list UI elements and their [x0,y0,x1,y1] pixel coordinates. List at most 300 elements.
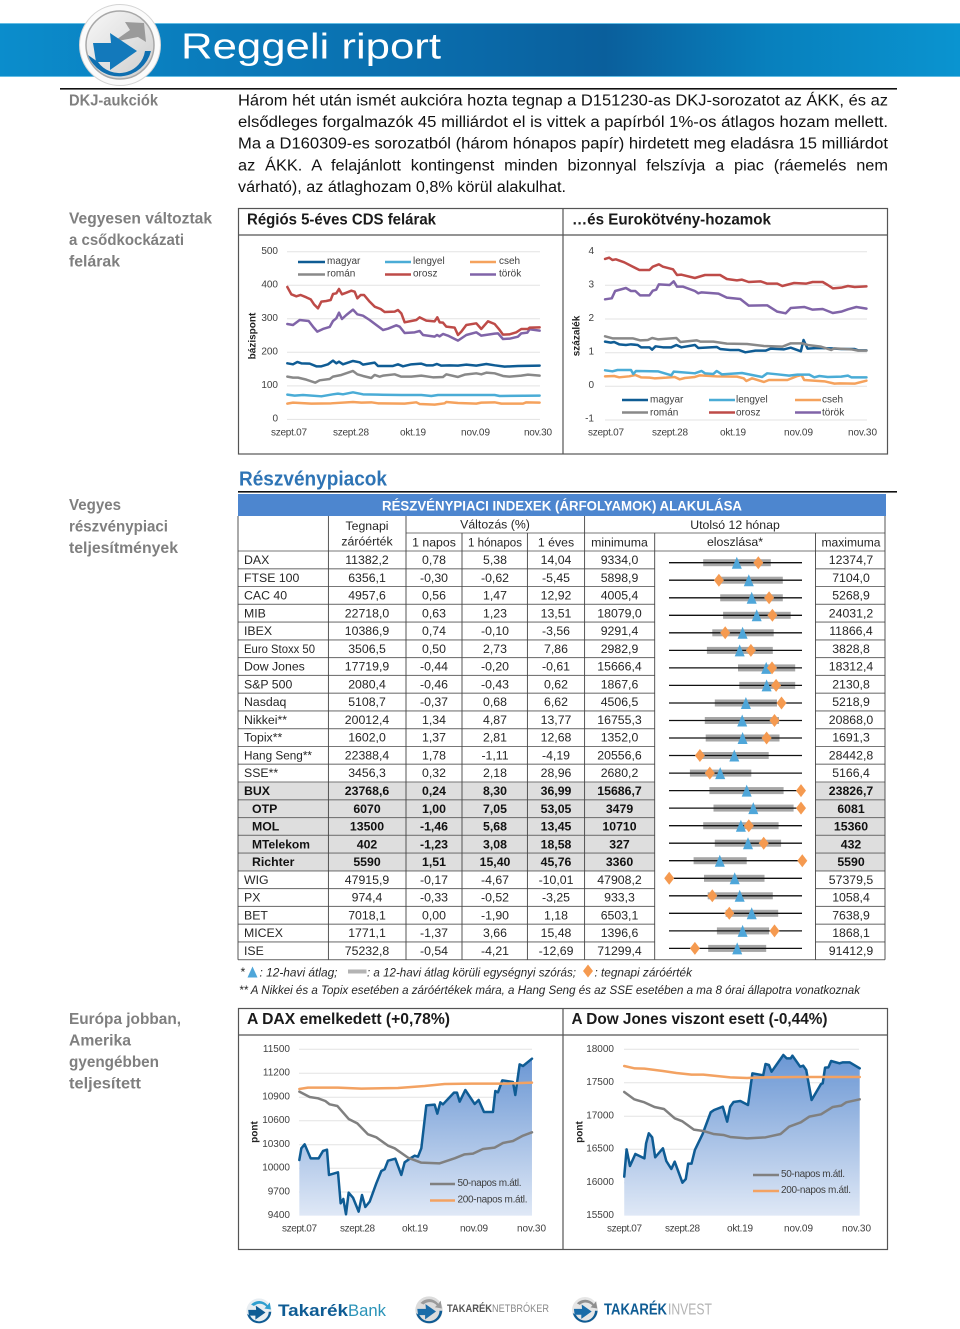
text block: DKJ auction commentary: várható), az átlaghozam 0,8% körül alakulhat. [238,179,566,196]
row: Richter: 5590 [837,855,865,869]
row: BUX: 23768,6 [345,784,389,798]
line chart: CDS: 100 [261,380,278,391]
area chart: DAX: nov.09 [460,1224,488,1234]
row: MIB: 1,23 [483,606,507,620]
row: IBEX: IBEX [244,624,272,638]
row: Euro Stoxx 50: 3828,8 [832,642,870,656]
row: Euro Stoxx 50: 3506,5 [348,642,386,656]
table footnotes and key: * [240,965,246,979]
row: S&P 500 [244,677,870,692]
row: S&P 500: 0,62 [544,677,568,691]
row: IBEX: 0,74 [422,624,446,638]
row: ISE: ISE [244,944,264,958]
row: Euro Stoxx 50: Euro Stoxx 50 [244,642,315,656]
area chart: DAX: szept.28 [340,1224,375,1234]
row: Richter: 45,76 [541,855,572,869]
row: Euro Stoxx 50: 2982,9 [601,642,638,656]
chart legend: Eurobond: román [650,408,678,418]
row: Richter: 5590 [353,855,381,869]
row: Nasdaq: 5108,7 [348,695,386,709]
footer logo: TakarékNetBróker [415,1296,549,1324]
row: DAX: 12374,7 [829,553,873,567]
chart legend: CDS [298,256,522,280]
row: Topix: 12,68 [541,731,572,745]
side heading: CDS: Vegyesen változtak [69,210,212,228]
row: MOL: 10710 [602,820,637,834]
heading: Eurobond chart: …és Eurokötvény-hozamok [572,212,771,228]
row: WIG: -0,17 [420,873,448,887]
row: DAX: 0,78 [422,553,446,567]
row: MICEX: 1868,1 [832,926,870,940]
chart legend: Eurobond [622,394,845,418]
row: BET: 7018,1 [348,908,386,922]
row: SSE [244,766,870,780]
row: Hang Seng: 22388,4 [345,748,389,762]
area chart: DAX: 10900 [262,1092,290,1102]
row: BUX: BUX [244,784,271,798]
row: Dow Jones [244,660,873,674]
panel: CDS and Eurobond charts [238,208,888,454]
line chart: Eurobond yields: szept.28 [652,428,688,438]
row: Richter: 1,51 [422,855,446,869]
icon: Reggeli riport logo [80,4,160,86]
heading: CDS chart: Régiós 5-éves CDS felárak [247,212,436,228]
row: OTP: 1,00 [422,802,446,816]
side heading: Europe: Európa jobban, [69,1011,181,1028]
chart legend: Dow Jones [753,1169,851,1196]
row: Hang Seng: -1,11 [481,748,509,762]
footer logo: TakarékInvest [572,1297,712,1323]
panel: DAX and Dow Jones charts [238,1008,888,1250]
table column headers: eloszlása* [707,535,763,549]
row: S&P 500: -0,43 [481,677,509,691]
row: BUX: 8,30 [483,784,507,798]
row: IBEX: 9291,4 [601,624,638,638]
row: Hang Seng: 1,78 [422,748,446,762]
row: IBEX: -3,56 [542,624,570,638]
line chart: Eurobond yields: nov.09 [784,428,813,438]
row: PX: -0,52 [481,891,509,905]
row: WIG: 47915,9 [345,873,389,887]
table column headers: 1 éves [538,536,574,550]
row: MIB: 18079,0 [597,606,642,620]
row: FTSE 100: FTSE 100 [244,571,300,585]
row: OTP: 53,05 [541,802,572,816]
table footnotes and key: ** A Nikkei és a Topix esetében a záróértékek mára, a Hang Seng és az SSE esetében a ma 8 órai állapotra vonatkoznak [239,983,861,997]
row: WIG: WIG [244,873,269,887]
axis title: pont: pont [574,1121,586,1143]
row: Hang Seng: 20556,6 [597,748,642,762]
row: MIB: 22718,0 [345,606,389,620]
row: Nasdaq: 0,68 [483,695,507,709]
area chart: DAX: 11500 [263,1044,290,1055]
row: FTSE 100: -5,45 [542,571,570,585]
line chart: Eurobond yields: 2 [588,313,594,324]
row: BUX: 23826,7 [829,784,873,798]
row: MTelekom: -1,23 [420,837,448,851]
row: CAC 40: 12,92 [541,588,572,602]
footer logo: TakarékInvest: INVEST [668,1302,712,1318]
table column headers: Változás (%) [460,518,530,532]
area chart: DAX: 9700 [268,1186,290,1198]
line chart: Eurobond yields: 0 [588,380,594,391]
section rule [238,491,897,493]
axis title: bázispont: bázispont [248,312,258,359]
table column headers [341,518,881,550]
row: WIG: -10,01 [539,873,574,887]
row: MTelekom: 432 [841,837,861,851]
top rule [60,88,897,90]
axis title: százalék: százalék [572,315,582,356]
table column headers: Tegnapi [345,519,389,533]
row: S&P 500: S&P 500 [244,677,292,691]
row: CAC 40: 1,47 [483,588,507,602]
table title bar: RÉSZVÉNYPIACI INDEXEK (ÁRFOLYAMOK) ALAKULÁSA [382,498,742,514]
row: MIB: 0,63 [422,606,446,620]
chart legend: Eurobond: orosz [736,408,760,418]
row: Nasdaq: 6,62 [544,695,568,709]
row: SSE: 2680,2 [601,766,638,780]
row: Nasdaq: 5218,9 [832,695,870,709]
chart legend: Eurobond: magyar [650,394,684,406]
side heading: DKJ-aukciók: DKJ-aukciók [69,92,158,110]
row: DAX [244,553,873,569]
area chart: Dow Jones: szept.07 [607,1224,642,1234]
row: BET: -1,90 [481,908,509,922]
row: Hang Seng [244,748,873,762]
row: MICEX: 15,48 [541,926,572,940]
chart legend: CDS: román [327,268,355,280]
row: Euro Stoxx 50: 7,86 [544,642,568,656]
row: DAX: 5,38 [483,553,507,567]
chart legend: Eurobond: lengyel [736,394,768,406]
row: SSE: 28,96 [541,766,572,780]
row: Topix: 2,81 [483,731,507,745]
chart legend: CDS: török [499,268,522,280]
row: S&P 500: 2080,4 [348,677,386,691]
area chart: DAX: 11200 [263,1068,290,1078]
line chart: Eurobond yields: 3 [588,280,594,290]
row: Topix: 1602,0 [348,731,386,745]
side heading: CDS [69,210,212,270]
table footnotes and key: : tegnapi záróérték [594,966,693,980]
row: SSE: 5166,4 [832,766,870,780]
row: MICEX [244,924,870,940]
line chart: CDS: 400 [261,280,278,290]
row: Topix: Topix** [244,731,282,745]
row: ISE: -12,69 [539,944,574,958]
line chart: CDS: 0 [272,414,278,424]
row: BET: 6503,1 [601,908,638,922]
row: MTelekom: MTelekom [252,837,310,851]
row: MOL: 13,45 [541,820,572,834]
row: FTSE 100 [244,571,870,587]
line chart: CDS: szept.28 [333,428,369,438]
row: BET [244,907,870,922]
line chart: Eurobond yields: szept.07 [588,428,624,438]
table title bar [238,494,886,516]
row: Nikkei: 16755,3 [597,713,642,727]
row: Richter [252,854,865,869]
chart legend: Dow Jones: 200-napos m.átl. [781,1185,851,1196]
side heading: Europe: teljesített [69,1076,141,1092]
row: FTSE 100: 5898,9 [601,571,638,585]
line chart: Eurobond yields: 1 [588,346,594,358]
table column headers: Utolsó 12 hónap [690,518,780,532]
table column headers: minimuma [591,536,648,550]
row: SSE: 2,18 [483,766,507,780]
row: Nasdaq: Nasdaq [244,695,287,709]
row: S&P 500: 2130,8 [832,677,870,691]
area chart: Dow Jones: 15500 [586,1210,614,1221]
text block: DKJ auction commentary: az ÁKK. A felajánlott kontingenst minden bizonnyal felszívja a piac (ráemelés nem [238,158,888,174]
row: Nikkei: Nikkei** [244,713,287,727]
header banner [0,4,960,86]
footer logo: TakarékBank: Bank [348,1301,386,1320]
row: Topix [244,731,870,745]
row: Euro Stoxx 50: 0,50 [422,642,446,656]
line chart: CDS: 300 [261,313,278,324]
icon: Invest mark [572,1297,598,1323]
table column headers: záróérték [341,534,393,548]
row: FTSE 100: -0,30 [420,571,448,585]
row: DAX: 9334,0 [601,553,638,567]
line chart: CDS: nov.30 [524,428,552,438]
area chart: DAX: 9400 [268,1210,290,1221]
row: CAC 40: 4957,6 [348,588,386,602]
row: MOL [252,819,868,834]
row: OTP: 6081 [837,802,865,816]
row: OTP [252,802,865,816]
row: FTSE 100: -0,62 [481,571,509,585]
row: ISE: -4,21 [481,944,509,958]
area chart: Dow Jones: 16000 [586,1177,614,1188]
row: Nikkei: 20012,4 [345,713,389,727]
row: MIB [244,606,873,622]
row: ISE: 71299,4 [597,944,642,958]
footer logo: TakarékBank [246,1298,386,1324]
row: Euro Stoxx 50: 2,73 [483,642,507,656]
area chart: Dow Jones: 17000 [586,1110,614,1122]
row: Dow Jones: 17719,9 [345,660,389,674]
table column headers: 1 napos [412,536,456,550]
row: Dow Jones: -0,61 [542,660,570,674]
text block: DKJ auction commentary [238,92,889,196]
row: CAC 40: 4005,4 [601,588,638,602]
footer logo: TakarékBank: Takarék [278,1301,349,1320]
area chart: DAX: szept.07 [282,1224,317,1234]
row: BET: 7638,9 [832,908,870,922]
row: Nikkei: 13,77 [541,713,572,727]
row: WIG: 57379,5 [829,873,873,887]
line chart: CDS: szept.07 [271,428,307,438]
banner title: Reggeli riport [181,26,441,66]
row: FTSE 100: 6356,1 [348,571,386,585]
chart legend: Dow Jones: 50-napos m.átl. [781,1169,845,1180]
chart legend: DAX: 200-napos m.átl. [458,1194,528,1206]
row: IBEX: -0,10 [481,624,509,638]
row: Hang Seng: -4,19 [542,748,570,762]
row: MIB: 13,51 [541,606,572,620]
row: MOL: 13500 [350,820,384,834]
side heading: equity: részvénypiaci [69,518,168,536]
row: Dow Jones: 18312,4 [829,660,873,674]
heading: Dow chart: A Dow Jones viszont esett (-0,44%) [572,1011,828,1028]
area chart: Dow Jones: szept.28 [665,1224,700,1234]
row: MIB: 24031,2 [829,606,873,620]
row: SSE: 3456,3 [348,766,386,780]
row: Dow Jones: 15666,4 [597,660,642,674]
line chart: CDS: okt.19 [400,428,426,438]
area chart: DAX: nov.30 [517,1224,546,1234]
heading: DAX chart: A DAX emelkedett (+0,78%) [247,1011,450,1028]
area chart: Dow Jones: 18000 [586,1044,614,1055]
row: Nikkei: 1,34 [422,713,446,727]
row: OTP: OTP [252,802,277,816]
footer logo: TakarékNetBróker: TAKARÉK [447,1302,492,1315]
table footnotes and key: : 12-havi átlag; [260,966,338,980]
chart legend: CDS: cseh [499,256,520,267]
row: Richter: 3360 [606,855,633,869]
table footnotes and key: : a 12-havi átlag körüli egységnyi szórás; [367,966,576,980]
icon: NetBróker mark [415,1296,443,1324]
side heading: equity [69,497,178,557]
row: WIG: -4,67 [481,873,509,887]
chart legend: Eurobond: cseh [822,394,843,406]
row: MTelekom: 3,08 [483,837,507,851]
row: S&P 500: 1867,6 [601,677,638,691]
text block: DKJ auction commentary: Ma a D160309-es sorozatból (három hónapos papír) hirdetett meg eladásra 15 milliárdot [238,136,889,152]
chart legend: Eurobond: török [822,408,845,418]
row: S&P 500: -0,46 [420,677,448,691]
line chart: CDS: 500 [261,246,278,257]
row: CAC 40: 5268,9 [832,588,870,602]
row: Topix: 1,37 [422,731,446,745]
row: PX: -3,25 [542,891,570,905]
row: MICEX: MICEX [244,926,283,940]
chart legend: CDS: magyar [327,256,361,267]
area chart: Dow Jones [574,1044,871,1234]
row: Nasdaq: 4506,5 [601,695,638,709]
row: IBEX: 11866,4 [829,624,873,638]
row: MOL: MOL [252,820,280,834]
row: BET: 1,18 [544,908,568,922]
row: MTelekom [252,837,861,851]
area chart: DAX [250,1044,546,1234]
row: OTP: 3479 [606,802,633,816]
row: DAX: DAX [244,553,269,567]
text block: DKJ auction commentary: elsődleges forgalmazók 45 milliárdot el is vittek a papírból 1%-os átlagos hozam mellett. [238,114,888,131]
row: WIG: 47908,2 [597,873,642,887]
row: BUX: 36,99 [541,784,572,798]
row: BUX: 0,24 [422,784,446,798]
side heading: equity: teljesítmények [69,540,178,557]
side heading: Europe: gyengébben [69,1054,159,1071]
row: Richter: 15,40 [480,855,511,869]
axis title: pont: pont [250,1121,260,1143]
line chart: Eurobond yields: 4 [588,246,594,257]
row: CAC 40: 0,56 [422,588,446,602]
row: Richter: Richter [252,855,295,869]
row: MICEX: 3,66 [483,926,507,940]
area chart: Dow Jones: nov.09 [784,1224,813,1234]
area chart: DAX: 10000 [262,1162,290,1174]
row: Dow Jones: Dow Jones [244,660,305,674]
line chart: Eurobond yields [572,246,877,438]
row: Topix: 1691,3 [832,731,870,745]
icon: TakarékBank mark [246,1298,272,1324]
side heading: CDS: felárak [69,254,120,270]
chart legend: CDS: orosz [413,268,437,280]
area chart: Dow Jones: nov.30 [842,1224,871,1234]
row: SSE: 0,32 [422,766,446,780]
footer logo: TakarékInvest: TAKARÉK [604,1300,667,1318]
chart legend: CDS: lengyel [413,256,445,267]
row: Dow Jones: -0,44 [420,660,448,674]
line chart: Eurobond yields: okt.19 [720,428,746,438]
row: ISE: 91412,9 [829,944,873,958]
row: Nasdaq: -0,37 [420,695,448,709]
side heading: Europe: Amerika [69,1032,131,1050]
line chart: Eurobond yields: nov.30 [848,428,877,438]
side heading: equity: Vegyes [69,497,121,514]
row: Dow Jones: -0,20 [481,660,509,674]
row: MICEX: 1771,1 [348,926,386,940]
row: MOL: -1,46 [420,820,448,834]
line chart: CDS: 200 [261,346,278,358]
area chart: Dow Jones: 17500 [586,1077,614,1088]
row: ISE: 75232,8 [345,944,389,958]
side heading: Europe [69,1011,181,1092]
line chart: CDS [248,246,552,438]
row: DAX: 11382,2 [345,553,389,567]
row: WIG [244,872,873,887]
row: BUX [244,784,873,798]
row: MICEX: 1396,6 [601,926,638,940]
row: PX: 1058,4 [832,891,870,905]
row: Topix: 1352,0 [601,731,638,745]
row: MICEX: -1,37 [420,926,448,940]
chart legend: DAX [430,1178,528,1206]
row: CAC 40: CAC 40 [244,588,287,602]
row: MTelekom: 18,58 [541,837,572,851]
area chart: DAX: okt.19 [402,1224,428,1234]
row: PX: -0,33 [420,891,448,905]
row: BET: 0,00 [422,908,446,922]
row: OTP: 6070 [353,802,381,816]
row: MOL: 5,68 [483,820,507,834]
row: Hang Seng: Hang Seng** [244,748,312,762]
row: PX [244,889,870,905]
row: OTP: 7,05 [483,802,507,816]
row: MOL: 15360 [834,820,868,834]
table column headers: maximuma [822,536,881,550]
row: FTSE 100: 7104,0 [832,571,870,585]
row: ISE: -0,54 [420,944,448,958]
footer logo: TakarékNetBróker: NETBRÓKER [492,1302,549,1315]
row: SSE: SSE** [244,766,278,780]
text block: DKJ auction commentary: Három hét után ismét aukcióra hozta tegnap a D151230-as DKJ-sorozatot az ÁKK, és az [238,92,888,110]
row: IBEX [244,624,873,639]
table: equity indices [238,494,886,960]
table column headers: 1 hónapos [468,536,522,550]
row: MTelekom: 327 [609,837,630,851]
row: BUX: 15686,7 [597,784,642,798]
row: Euro Stoxx 50 [244,642,870,657]
row: CAC 40 [244,588,870,604]
line chart: Eurobond yields: -1 [585,414,594,424]
row: PX: 933,3 [604,891,635,905]
